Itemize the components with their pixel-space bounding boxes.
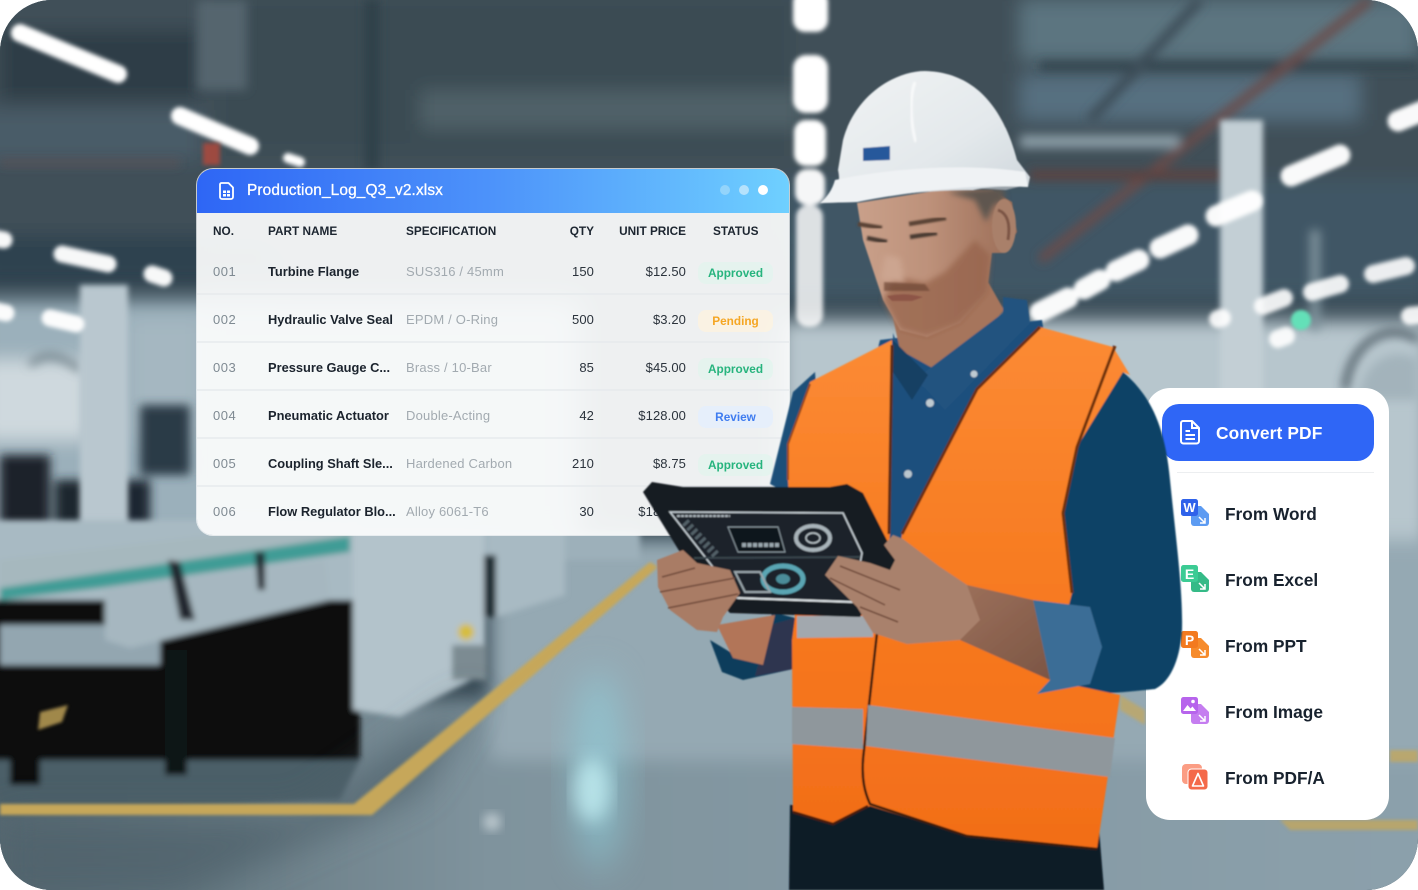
row 002 bbox=[197, 295, 789, 343]
button: Convert PDF bbox=[1162, 404, 1374, 461]
ceiling lights bbox=[0, 33, 1418, 339]
row 006: 006 bbox=[213, 504, 236, 519]
panel: spreadsheet table bbox=[197, 169, 789, 535]
shirt torso bbox=[850, 320, 1060, 620]
row 001: $12.50 bbox=[646, 264, 686, 279]
row 003: 003 bbox=[213, 360, 236, 375]
menu item: From PPT: P bbox=[1185, 632, 1194, 648]
window dots bbox=[720, 185, 768, 195]
table header row: PART NAME bbox=[268, 224, 337, 238]
row 001: 001 bbox=[213, 264, 236, 279]
row 006 bbox=[213, 504, 686, 519]
menu item: From Excel: From Excel bbox=[1225, 570, 1318, 590]
row 005: 005 bbox=[213, 456, 236, 471]
table header row: UNIT PRICE bbox=[619, 224, 686, 238]
reflective bands bbox=[792, 616, 1115, 777]
menu item: From PDF/A bbox=[1182, 764, 1325, 790]
menu item: From Word: From Word bbox=[1225, 504, 1317, 524]
row 003 bbox=[197, 343, 789, 391]
row 004: Review bbox=[715, 410, 756, 424]
row 002: Hydraulic Valve Seal bbox=[268, 312, 393, 327]
row 006: Alloy 6061-T6 bbox=[406, 504, 489, 519]
forearm right bbox=[910, 567, 1050, 680]
row 002: 500 bbox=[572, 312, 594, 327]
table header row: QTY bbox=[570, 224, 594, 238]
menu item: From PDF/A: From PDF/A bbox=[1225, 768, 1325, 788]
row 005: $8.75 bbox=[653, 456, 686, 471]
row 001 bbox=[197, 247, 789, 295]
row 001: 150 bbox=[572, 264, 594, 279]
row 003: Approved bbox=[708, 362, 763, 376]
right sleeve bbox=[1037, 345, 1182, 695]
file name: Production_Log_Q3_v2.xlsx bbox=[247, 182, 443, 199]
button: Convert PDF: Convert PDF bbox=[1216, 423, 1322, 443]
row 003: Pressure Gauge C... bbox=[268, 360, 390, 375]
row 006: 30 bbox=[579, 504, 594, 519]
row 004: Double-Acting bbox=[406, 408, 490, 423]
row 003: $45.00 bbox=[646, 360, 686, 375]
menu item: From Word: W bbox=[1183, 500, 1196, 515]
panel: convert menu bbox=[1146, 388, 1389, 820]
row 002: $3.20 bbox=[653, 312, 686, 327]
menu item: From Word bbox=[1181, 499, 1317, 526]
neck bbox=[893, 280, 1004, 375]
rolled cuff bbox=[1033, 600, 1102, 694]
machine and conveyor bbox=[0, 520, 640, 815]
hard hat and head bbox=[820, 71, 1030, 337]
row 004: 42 bbox=[579, 408, 594, 423]
row 003: 85 bbox=[579, 360, 594, 375]
menu item: From Image bbox=[1181, 697, 1323, 724]
row 001: SUS316 / 45mm bbox=[406, 264, 504, 279]
row 004: 004 bbox=[213, 408, 236, 423]
row 002: Pending bbox=[712, 314, 759, 328]
row 001: Turbine Flange bbox=[268, 264, 359, 279]
table header row: STATUS bbox=[713, 224, 758, 238]
row 006: Flow Regulator Blo... bbox=[268, 504, 396, 519]
row 001: Approved bbox=[708, 266, 763, 280]
floor bbox=[0, 540, 1418, 890]
table header row bbox=[213, 224, 758, 238]
menu item: From Excel bbox=[1181, 565, 1318, 592]
menu item: From Excel: E bbox=[1185, 566, 1194, 582]
row 003: Brass / 10-Bar bbox=[406, 360, 492, 375]
row 004 bbox=[197, 391, 789, 439]
safety vest bbox=[788, 327, 1130, 849]
yellow floor lines bbox=[0, 562, 1418, 830]
row 005: Hardened Carbon bbox=[406, 456, 512, 471]
hands bbox=[657, 535, 980, 644]
menu item: From Image: From Image bbox=[1225, 702, 1323, 722]
trousers bbox=[789, 805, 1104, 890]
row 002: 002 bbox=[213, 312, 236, 327]
row 004: Pneumatic Actuator bbox=[268, 408, 389, 423]
table title bar bbox=[197, 169, 789, 213]
row 004: $128.00 bbox=[638, 408, 686, 423]
icon: spreadsheet file bbox=[219, 182, 234, 200]
row 006: $185.00 bbox=[638, 504, 686, 519]
menu item: From PPT: From PPT bbox=[1225, 636, 1307, 656]
row 005: Coupling Shaft Sle... bbox=[268, 456, 393, 471]
left sleeve bbox=[710, 372, 820, 680]
table header row: NO. bbox=[213, 224, 234, 238]
collar bbox=[893, 297, 1030, 478]
row 005: Approved bbox=[708, 458, 763, 472]
row 002: EPDM / O-Ring bbox=[406, 312, 498, 327]
row 005: 210 bbox=[572, 456, 594, 471]
tablet bbox=[643, 482, 897, 617]
row 005 bbox=[197, 439, 789, 487]
table header row: SPECIFICATION bbox=[406, 224, 496, 238]
menu item: From PPT bbox=[1181, 631, 1307, 658]
